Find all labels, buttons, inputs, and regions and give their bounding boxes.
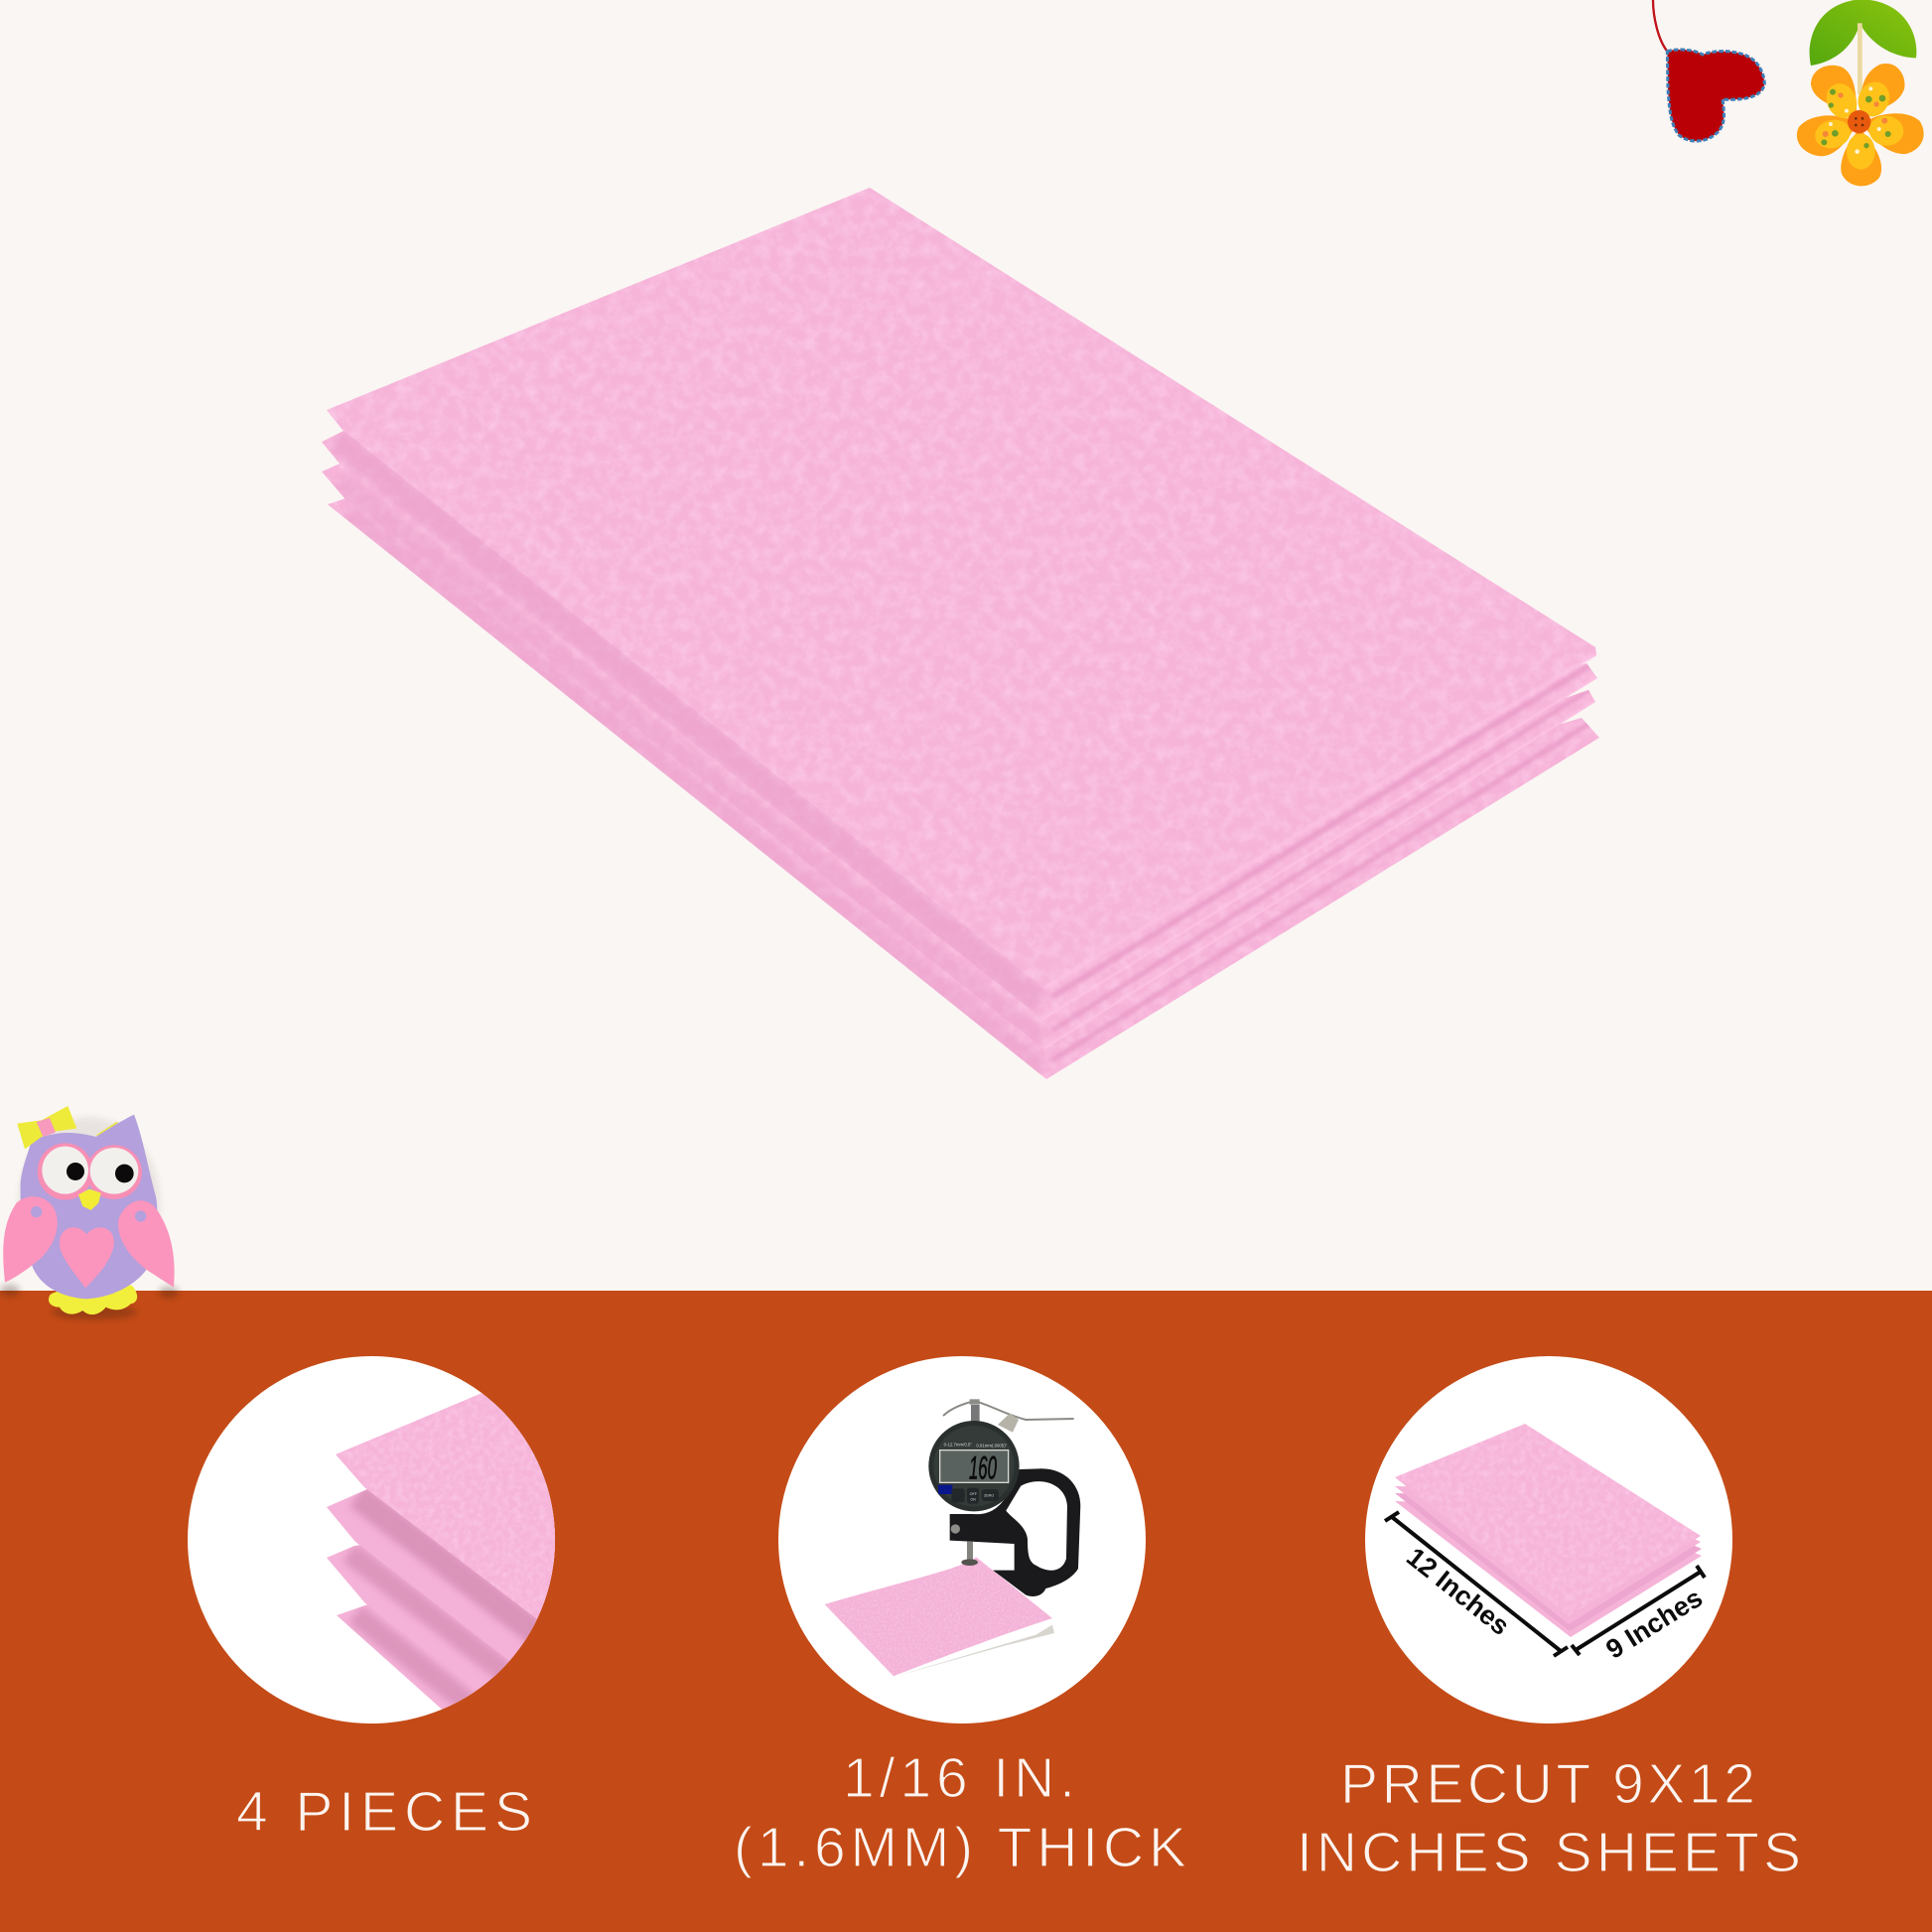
panel: 1/16 inch thick: [734, 1356, 1186, 1879]
felt sheet 3: [322, 464, 1595, 1049]
panel: 4 pieces: [188, 1356, 555, 1831]
orange bottom band: [0, 1291, 1932, 1932]
close-up of stacked felt edges: [327, 1393, 555, 1710]
thickness gauge measuring a felt sheet: [825, 1399, 1080, 1677]
thickness gauge measuring a felt sheet: 0.01mm(.0005)": [976, 1444, 1008, 1449]
white circle 2: [778, 1356, 1146, 1724]
thickness gauge measuring a felt sheet: 160: [969, 1449, 997, 1485]
white circle 3: [1365, 1356, 1732, 1724]
label: precut 9x12 inches sheets: [1297, 1752, 1801, 1884]
label: 1/16 in. (1.6mm) thick: 1/16 IN.: [843, 1746, 1075, 1810]
small felt stack: [1395, 1424, 1702, 1637]
dimension line: 12 inches: [1385, 1512, 1568, 1656]
felt sheet 4 (bottom): [328, 498, 1599, 1079]
dimension line: 9 inches: [1572, 1566, 1708, 1665]
label: 1/16 in. (1.6mm) thick: (1.6MM) THICK: [734, 1816, 1186, 1879]
decoration: red felt heart on a thread: [1653, 0, 1764, 141]
felt sheet 1 (top): [327, 188, 1596, 989]
decoration: orange felt flower with green leaves: [1797, 0, 1924, 186]
main product: stack of four pink felt sheets: [322, 188, 1599, 1079]
dimension line: 12 inches: 12 Inches: [1401, 1542, 1515, 1641]
thickness gauge measuring a felt sheet: ZERO: [984, 1493, 994, 1497]
thickness gauge measuring a felt sheet: OFF: [970, 1492, 978, 1496]
label: precut 9x12 inches sheets: INCHES SHEETS: [1297, 1821, 1801, 1884]
label: precut 9x12 inches sheets: PRECUT 9X12: [1340, 1752, 1755, 1816]
felt sheet 2: [322, 431, 1597, 1020]
dimension line: 9 inches: 9 Inches: [1600, 1583, 1708, 1665]
label: 4 pieces: 4 PIECES: [236, 1780, 532, 1844]
panel: precut 9x12 inch sheets: [1297, 1356, 1801, 1884]
thickness gauge measuring a felt sheet: ON: [970, 1498, 976, 1502]
decoration: felt owl: [0, 1106, 179, 1319]
white circle 1: [188, 1356, 555, 1724]
label: 1/16 in. (1.6mm) thick: [734, 1746, 1186, 1879]
thickness gauge measuring a felt sheet: 0-12.7mm/0.5": [944, 1443, 972, 1448]
